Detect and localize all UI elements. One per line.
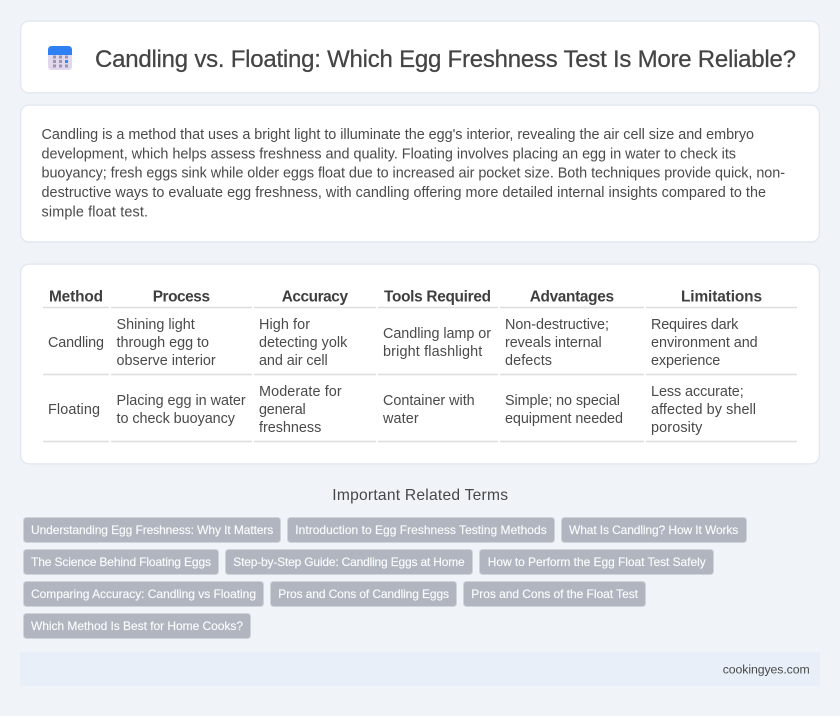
text block: intro paragraph: buoyancy; fresh eggs sink while older eggs float due to increased air pocket size. Both techniques provide quick, non- [42, 166, 785, 182]
table row: floating: Simple; no special [505, 393, 620, 409]
table row: floating: Container with [383, 393, 475, 409]
table row: floating: equipment needed [505, 411, 623, 427]
tag [562, 518, 746, 542]
tag [480, 550, 714, 574]
tag: Which Method Is Best for Home Cooks? [31, 619, 243, 633]
table row: floating: Floating [48, 402, 100, 418]
footer [20, 652, 820, 686]
tag [24, 518, 280, 542]
tag [226, 550, 472, 574]
table row: floating: general [259, 402, 306, 418]
tag: The Science Behind Floating Eggs [31, 555, 211, 569]
table row: floating [48, 384, 756, 436]
table row: candling: defects [505, 353, 552, 369]
tag: How to Perform the Egg Float Test Safely [488, 555, 706, 569]
table row: candling [48, 317, 758, 369]
table row: candling: through egg to [116, 335, 209, 351]
table row: candling: Shining light [116, 317, 195, 333]
text block: intro paragraph: Candling is a method that uses a bright light to illuminate the egg's interior, revealing the air cell size and embryo [42, 127, 754, 143]
table row: candling: reveals internal [505, 335, 602, 351]
table row: candling: High for [259, 317, 310, 333]
table row: candling: environment and [651, 335, 758, 351]
tag: Pros and Cons of the Float Test [471, 587, 639, 601]
tag: Comparing Accuracy: Candling vs Floating [31, 587, 256, 601]
table row: candling: observe interior [116, 353, 216, 369]
panel: comparison table [21, 264, 819, 464]
table row: candling: bright flashlight [383, 344, 482, 360]
table header row: Tools Required [384, 289, 491, 306]
tag [24, 550, 218, 574]
panel: header [21, 21, 819, 93]
tag [464, 582, 646, 606]
text block: intro paragraph: development, which helps assess freshness and quality. Floating involves placing an egg in water to check its [42, 146, 736, 162]
tag: What Is Candling? How It Works [569, 523, 738, 537]
table header row: Method [49, 289, 103, 306]
table row: floating: affected by shell [651, 402, 756, 418]
tag [288, 518, 554, 542]
table row: candling: Candling [48, 335, 104, 351]
tag [24, 582, 264, 606]
table row: candling: experience [651, 353, 720, 369]
text block: intro paragraph [42, 127, 785, 220]
table header row: Advantages [530, 289, 614, 306]
text block: intro paragraph: destructive ways to evaluate egg freshness, with candling offering more detailed internal insights compared to the [42, 185, 766, 201]
icon: calendar [48, 46, 72, 70]
table header row: Limitations [681, 289, 762, 306]
table row: floating: porosity [651, 420, 703, 436]
table row: candling: Candling lamp or [383, 326, 491, 342]
table row: floating: to check buoyancy [116, 411, 236, 427]
footer source text: cookingyes.com [723, 662, 810, 676]
table header row: Process [153, 289, 210, 306]
tag: Understanding Egg Freshness: Why It Matters [31, 523, 273, 537]
text block: intro paragraph: simple float test. [42, 204, 148, 220]
title: Candling vs. Floating: Which Egg Freshness Test Is More Reliable? [95, 46, 796, 73]
table header row: Accuracy [282, 289, 348, 306]
tag [270, 582, 456, 606]
table row: candling: Non-destructive; [505, 317, 609, 333]
table row: floating: Moderate for [259, 384, 342, 400]
tag: Pros and Cons of Candling Eggs [278, 587, 449, 601]
heading: important related terms: Important Related Terms [332, 487, 508, 504]
panel: related term tags [24, 518, 746, 638]
panel: intro text [21, 105, 819, 242]
table row: floating: water [382, 411, 419, 427]
table row: floating: Placing egg in water [116, 393, 246, 409]
table row: candling: and air cell [259, 353, 328, 369]
table row: candling: Requires dark [651, 317, 739, 333]
table row: candling: detecting yolk [259, 335, 348, 351]
table header row [49, 289, 762, 306]
tag: Introduction to Egg Freshness Testing Methods [295, 523, 547, 537]
table row: floating: Less accurate; [651, 384, 744, 400]
tag [24, 614, 250, 638]
tag: Step-by-Step Guide: Candling Eggs at Home [233, 555, 465, 569]
table row: floating: freshness [259, 420, 321, 436]
